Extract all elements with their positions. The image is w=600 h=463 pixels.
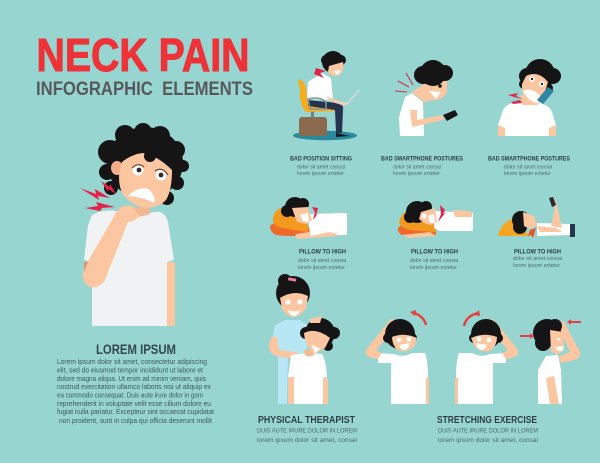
label: bad smartphone postures 1: BAD SMARTPHONE POSTURES [381,156,464,162]
label: pillow 2 [410,248,458,271]
label: bad position sitting [290,156,352,177]
text block: lorem body: reprehenderit in voluptate velit esse cillum dolore eu [57,399,211,408]
figure: stretching side [520,319,581,404]
label: pillow 1: lorem ipsum ectetur [298,265,345,271]
main figure: man with neck pain [80,123,189,326]
label: stretching exercise: lorem ipsum dolor sit amet, consai [438,437,539,444]
label: physical therapist [257,415,358,444]
heading: lorem ipsum: LOREM IPSUM [96,342,176,357]
label: bad position sitting: lorem ipsum ectetur [297,171,344,177]
text block: lorem body: elit, sed do eiusmod tempor incididunt ut labore et [57,366,203,374]
figure: pillow too high 1 [270,197,347,239]
label: pillow 2: lorem ipsum ectetur [410,265,457,271]
label: pillow 3: dolor sit amet consai [513,256,562,262]
label: stretching exercise [437,415,539,444]
label: bad smartphone postures 2: dolor sit amet consai [504,164,552,170]
text block: lorem body: dolore magna aliqua. Ut enim ad minim veniam, quis [57,374,206,383]
text block: lorem body [57,357,214,425]
label: bad smartphone postures 2: lorem ipsum ectetur [504,171,551,177]
label: pillow 3: lorem ipsum ectetur [513,263,560,269]
label: bad smartphone postures 1: dolor sit amet consai [393,164,441,170]
label: bad smartphone postures 2: BAD SMARTPHONE POSTURES [488,156,571,162]
label: stretching exercise: DUIS AUTE IRURE DOLOR IN LOREM [438,428,538,434]
icon: pain bolts [80,181,116,211]
label: bad smartphone postures 2 [488,156,571,177]
text block: lorem body: non proident, sunt in culpa qui officia deserunt mollit [59,416,212,425]
subtitle: INFOGRAPHIC ELEMENTS [36,79,253,100]
label: bad position sitting: dolor sit amet consai [297,164,345,170]
label: physical therapist: DUIS AUTE IRURE DOLOR IN LOREM [257,428,357,434]
label: pillow 2: dolor sit amet consai [410,258,458,264]
label: stretching exercise: STRETCHING EXERCISE [437,415,537,426]
figure: pillow too high 3 [498,197,575,238]
label: pillow 2: PILLOW TO HIGH [411,248,458,256]
label: pillow 1: PILLOW TO HIGH [299,248,346,256]
text block: lorem body: fugiat nulla pariatur. Excepteur sint occaecat cupidatat [57,407,214,416]
label: bad position sitting: BAD POSITION SITTING [290,156,352,162]
figure: pillow too high 2 [398,201,473,238]
figure: stretching right [455,310,518,404]
label: physical therapist: PHYSICAL THERAPIST [258,415,355,426]
label: pillow 1: dolor sit amet consai [298,258,346,264]
label: physical therapist: lorem ipsum dolor sit amet, consai [257,437,358,444]
label: bad smartphone postures 1: lorem ipsum ectetur [393,171,440,177]
figure: bad smartphone posture, phone to ear [498,59,561,136]
figure: physical therapist and patient [269,274,340,404]
icon: red arrows [395,73,413,92]
label: pillow 3 [513,248,562,269]
label: pillow 3: PILLOW TO HIGH [514,248,561,256]
figure: bad smartphone posture, side [395,60,458,136]
figure: stretching left [366,310,429,404]
title: NECK PAIN [36,29,250,81]
icon: red arrows [520,319,581,339]
text block: lorem body: Lorem ipsum dolor sit amet, consectetur adipiscing [57,357,207,366]
text block: lorem body: nostrud exercitation ullamco laboris nisi ut aliquip ex [57,382,211,391]
figure: bad position sitting [293,51,359,140]
label: pillow 1 [298,248,346,271]
text block: lorem body: ea commodo consequat. Duis aute irure dolor in gom [57,390,203,400]
label: bad smartphone postures 1 [381,156,464,177]
